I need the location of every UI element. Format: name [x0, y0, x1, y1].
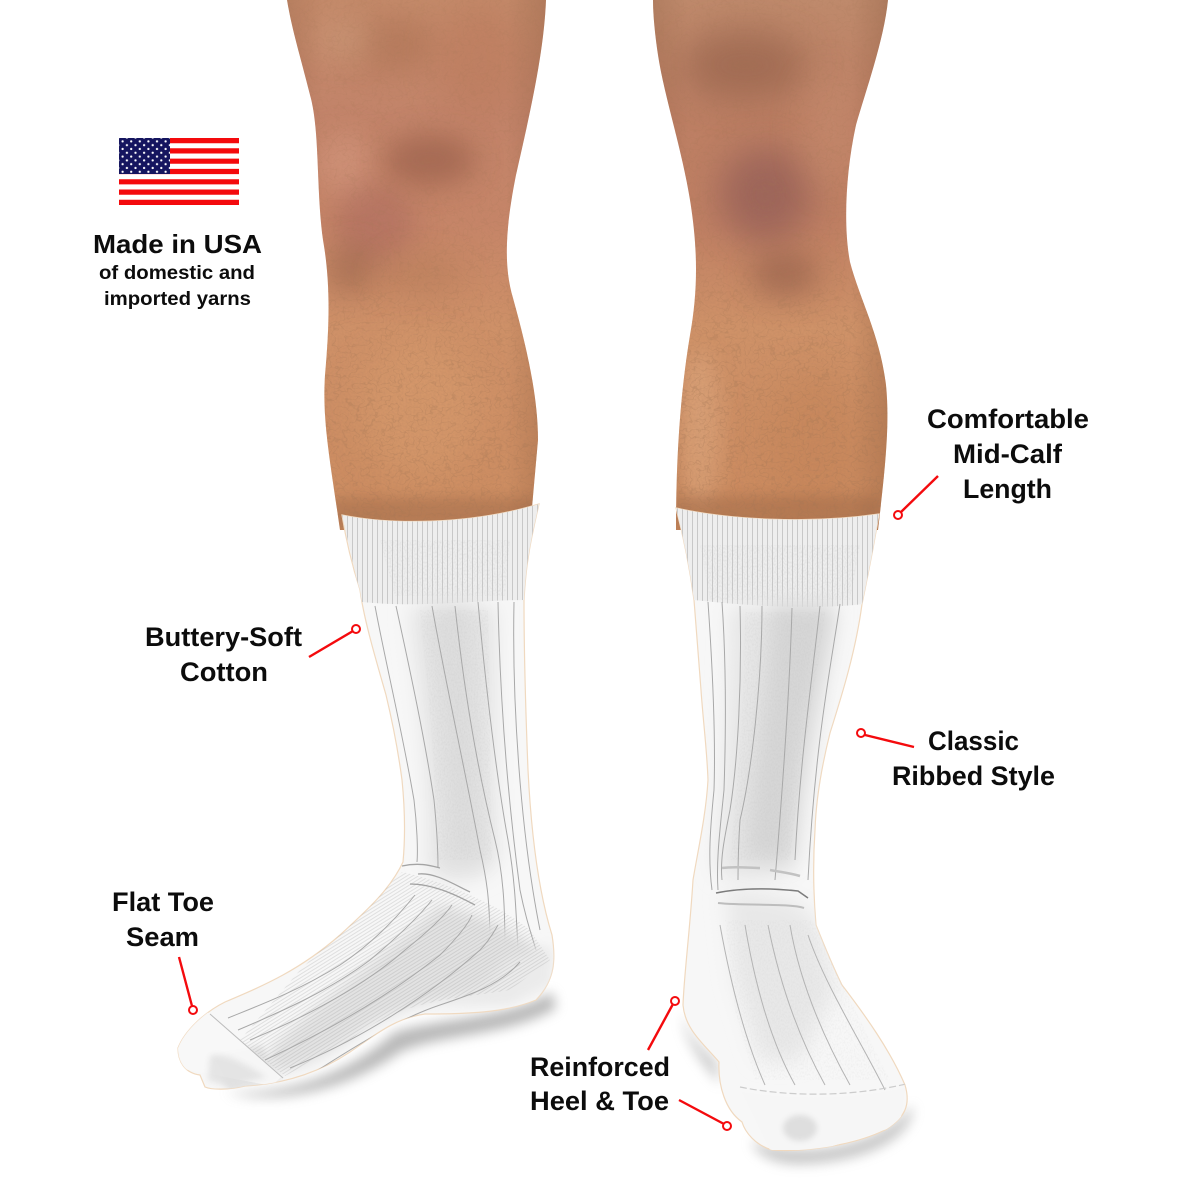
- right sock: leg ribs: [708, 602, 840, 890]
- right leg: [650, 0, 890, 530]
- callout: reinforced heel and toe: [530, 997, 731, 1130]
- left sock: leg ribs: [375, 602, 540, 960]
- left sock: leg shading: [410, 606, 498, 880]
- callout: made in USA: of domestic and: [99, 262, 255, 284]
- foot shadow: right: [682, 1012, 912, 1164]
- callout: made in USA: Made in USA: [93, 229, 262, 259]
- left sock: ankle creases: [402, 864, 475, 905]
- left sock: foot shading: [270, 905, 548, 1071]
- left sock: cuff ribbing: [342, 504, 539, 604]
- callout: classic ribbed style: Classic: [928, 726, 1019, 756]
- right sock: leg shading: [716, 606, 835, 879]
- left sock: foot ribs: [228, 895, 520, 1075]
- callout: buttery-soft cotton: Cotton: [180, 657, 268, 687]
- callout: classic ribbed style: [857, 726, 1055, 791]
- right sock: cuff ribbing: [676, 508, 879, 607]
- callout: buttery-soft cotton: Buttery-Soft: [145, 622, 302, 652]
- right sock: foot texture: [725, 920, 890, 1080]
- callout: reinforced heel and toe: Heel & Toe: [530, 1086, 669, 1116]
- right knee shading: [650, 0, 890, 530]
- callout: comfortable mid-calf length: [894, 404, 1089, 519]
- callout: comfortable mid-calf length: Comfortable: [927, 404, 1089, 434]
- left sock: [178, 504, 554, 1092]
- callout: comfortable mid-calf length: Length: [963, 474, 1052, 504]
- right sock: [676, 508, 907, 1150]
- callout: flat toe seam: Flat Toe: [112, 887, 214, 917]
- callout: flat toe seam: Seam: [126, 922, 199, 952]
- callout: made in USA: imported yarns: [104, 288, 251, 310]
- flag: United States: [119, 138, 239, 205]
- right sock: toe shading: [769, 1115, 902, 1150]
- flag canton: [119, 138, 170, 174]
- callout: reinforced heel and toe: Reinforced: [530, 1052, 670, 1082]
- left knee shading: [280, 0, 550, 532]
- right sock: ankle creases: [716, 889, 808, 898]
- callout: flat toe seam: [112, 887, 214, 1014]
- right sock: foot ribs: [720, 925, 885, 1090]
- foot shadow: left: [225, 992, 556, 1097]
- right leg hair: [676, 169, 888, 529]
- flag stripes: [119, 138, 239, 205]
- left sock: foot texture: [240, 872, 550, 1076]
- callout: comfortable mid-calf length: Mid-Calf: [953, 439, 1062, 469]
- flag stars: [119, 138, 170, 174]
- callout: made in USA: [93, 229, 262, 310]
- left leg: [280, 0, 550, 532]
- callout: buttery-soft cotton: [145, 622, 360, 687]
- callout: classic ribbed style: Ribbed Style: [892, 761, 1055, 791]
- left sock: toe seam band: [178, 1010, 282, 1086]
- left leg hair: [318, 134, 538, 527]
